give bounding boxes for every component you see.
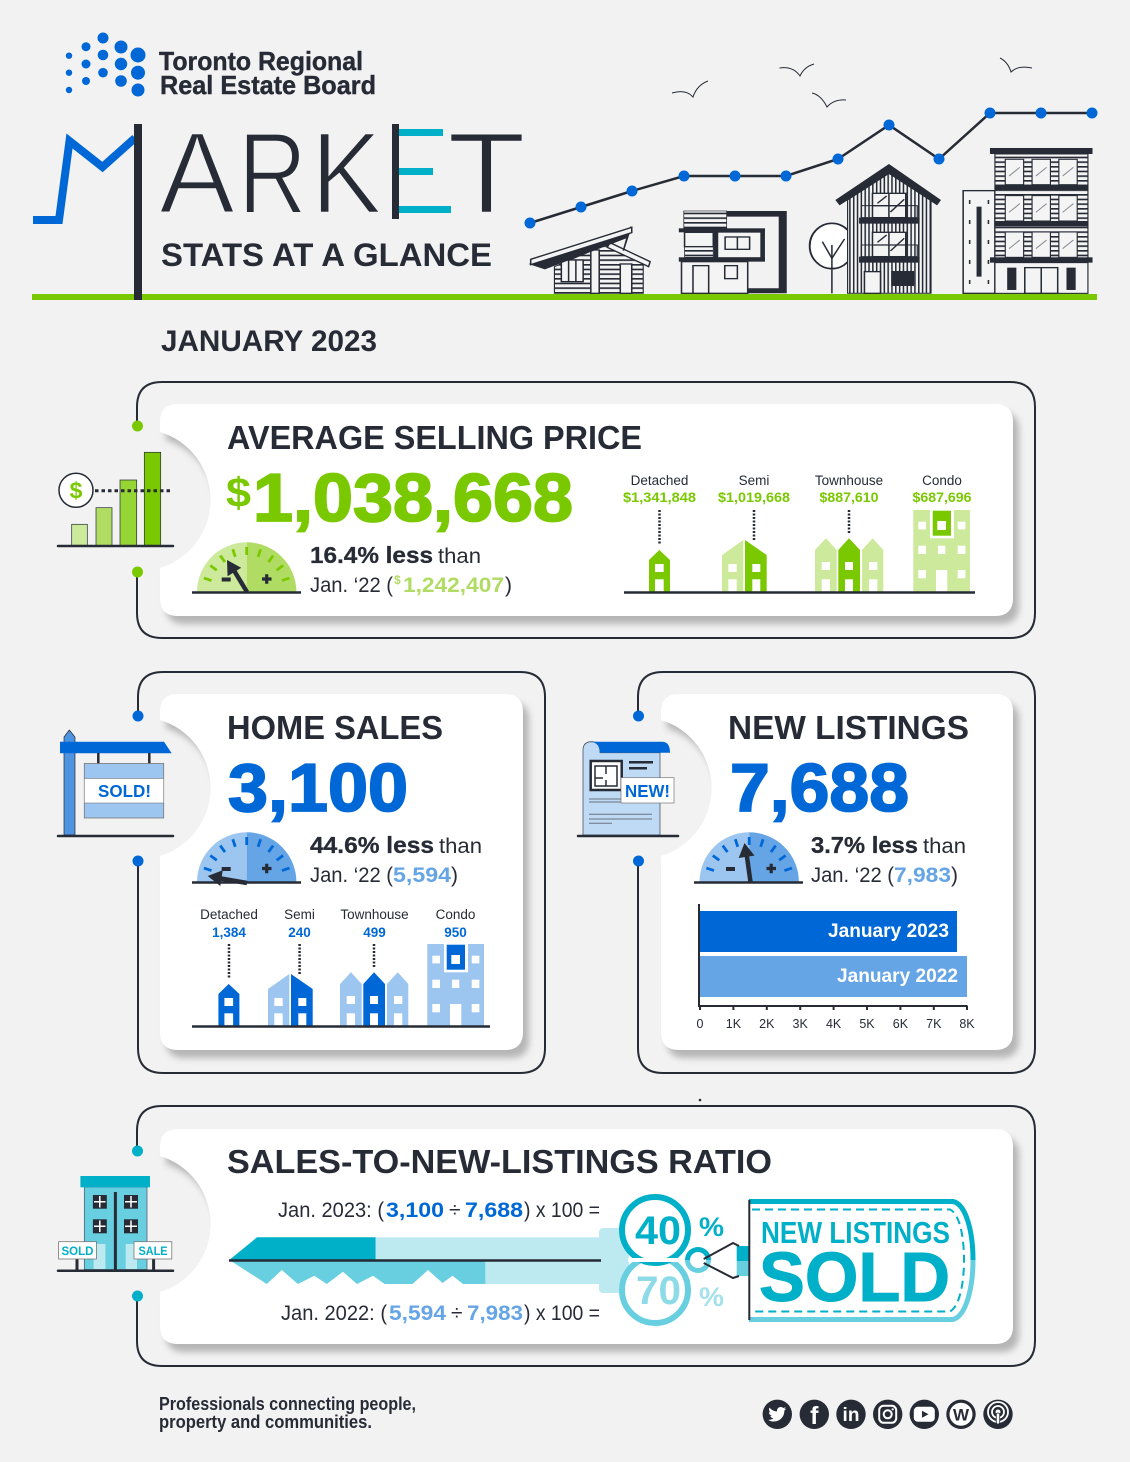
key graphic [229, 1228, 629, 1293]
icon: wordpress [946, 1400, 976, 1429]
subtitle: STATS AT A GLANCE [161, 237, 492, 273]
bar chart: listings comparison: January 2023 [828, 921, 949, 942]
icon: sold sign [58, 730, 173, 836]
change statement [310, 832, 482, 887]
icon: new listing document [578, 742, 678, 836]
letters ARK: R [238, 108, 307, 238]
ratio rings 40% and 70%: % [699, 1282, 724, 1312]
labels: Semi [739, 473, 769, 488]
icon: wordpress: W [953, 1406, 970, 1424]
bar chart: listings comparison: 1K [726, 1017, 742, 1031]
townhouses [340, 972, 408, 1026]
heading: HOME SALES [227, 709, 443, 746]
bar chart: listings comparison: 0 [697, 1017, 704, 1031]
heading: AVERAGE SELLING PRICE [227, 419, 642, 456]
townhouses [815, 538, 883, 592]
change statement: than [438, 545, 481, 568]
house 2 [679, 211, 787, 293]
formula 2022: Jan. 2022: ( [281, 1302, 387, 1325]
change statement: ) [451, 864, 458, 887]
logo wordmark [159, 46, 376, 100]
letters ARK: A [159, 108, 236, 238]
bar chart: listings comparison: January 2022 [837, 966, 958, 987]
formula 2022 [281, 1302, 600, 1325]
bar chart: listings comparison: 2K [759, 1017, 775, 1031]
change statement: than [923, 835, 966, 858]
icon: apartment building with signs: SOLD [62, 1244, 94, 1258]
gauge [192, 832, 301, 886]
labels: Detached [200, 907, 258, 922]
labels: Townhouse [340, 907, 409, 922]
formula 2023: 7,688 [465, 1199, 523, 1222]
labels: Semi [284, 907, 315, 922]
ratio rings 40% and 70% [622, 1197, 724, 1323]
icon: new listing document: NEW! [625, 781, 670, 801]
labels: 950 [444, 925, 467, 940]
icon: facebook: f [810, 1402, 819, 1430]
bar chart: listings comparison: 8K [959, 1017, 975, 1031]
change statement: Jan. ‘22 ( [310, 574, 393, 597]
logo dot mark [66, 32, 146, 96]
logo wordmark: Real Estate Board [160, 70, 376, 100]
letter E [399, 129, 451, 213]
stylised M line [33, 138, 135, 220]
tree [810, 223, 854, 293]
icon: linkedin: in [843, 1405, 859, 1426]
labels: Condo [436, 907, 475, 922]
change statement: than [439, 835, 482, 858]
labels [623, 473, 972, 505]
change statement: $ [394, 573, 401, 587]
change statement [310, 542, 512, 597]
icon: apartment building with signs: SALE [138, 1244, 168, 1258]
leader lines [229, 944, 374, 979]
ratio rings 40% and 70%: % [699, 1212, 724, 1242]
change statement: 1,242,407 [403, 574, 504, 597]
icon: podcast [983, 1400, 1013, 1429]
icon: apartment building with signs [58, 1176, 173, 1271]
icon: sold sign: SOLD! [98, 781, 151, 801]
semi house [722, 540, 767, 592]
formula 2022: ÷ [451, 1302, 463, 1325]
labels: 499 [363, 925, 386, 940]
ratio rings 40% and 70%: 40 [635, 1209, 681, 1253]
labels: 1,384 [212, 925, 246, 940]
icon: linkedin [836, 1400, 866, 1429]
home type prices [623, 473, 975, 592]
letters ARK [159, 108, 382, 238]
labels: Townhouse [815, 473, 883, 488]
labels: 240 [288, 925, 311, 940]
apartment building [963, 148, 1093, 293]
change statement: ) [951, 864, 958, 887]
footer tagline: Professionals connecting people, [159, 1393, 416, 1414]
sold tag [704, 1200, 973, 1320]
change statement: 7,983 [894, 864, 951, 887]
formula 2022: 5,594 [389, 1302, 446, 1325]
logo: Toronto Regional Real Estate Board [66, 32, 376, 100]
ground line [32, 124, 1097, 300]
letter T: T [447, 108, 526, 238]
panel: sales-to-new-listings ratio [58, 1106, 1035, 1366]
icon: youtube [910, 1400, 939, 1429]
labels: $1,341,848 [623, 490, 697, 505]
change statement: 5,594 [393, 864, 451, 887]
labels [200, 907, 475, 940]
formula 2022: ) x 100 = [524, 1302, 600, 1325]
leader lines [660, 510, 849, 545]
main figure: 7,688 [730, 750, 909, 826]
icon: price bar chart [58, 452, 173, 546]
condo [913, 510, 970, 592]
gauge [192, 542, 301, 592]
icon: facebook [800, 1400, 829, 1430]
panel: average selling price [58, 382, 1035, 638]
change statement: ) [505, 574, 512, 597]
formula 2023 [278, 1199, 600, 1222]
formula 2023: Jan. 2023: ( [278, 1199, 384, 1222]
change statement: 44.6% less [310, 832, 434, 858]
gauge [694, 832, 803, 882]
house 3 [835, 164, 941, 293]
footer tagline: property and communities. [159, 1411, 372, 1432]
labels: $1,019,668 [718, 490, 791, 505]
change statement: Jan. ‘22 ( [811, 864, 894, 887]
house 1 [531, 227, 650, 293]
bar chart: listings comparison [697, 904, 975, 1031]
bar chart: listings comparison: 5K [859, 1017, 875, 1031]
labels: Detached [631, 473, 688, 488]
title: MARKET [33, 108, 526, 238]
logo wordmark: Toronto Regional [159, 46, 363, 76]
bar chart: listings comparison: 6K [893, 1017, 909, 1031]
detached house [218, 984, 239, 1026]
formula 2023: ÷ [449, 1199, 461, 1222]
main price figure: 1,038,668 [253, 460, 573, 536]
date heading: JANUARY 2023 [161, 325, 377, 358]
social media icons [763, 1400, 1013, 1430]
labels: $687,696 [912, 490, 972, 505]
letters ARK: K [311, 108, 382, 238]
change statement: 16.4% less [310, 542, 433, 568]
condo [427, 944, 484, 1026]
panel: home sales [58, 672, 545, 1073]
heading: SALES-TO-NEW-LISTINGS RATIO [227, 1143, 772, 1180]
icon: price bar chart: $ [70, 478, 83, 504]
home type sales [192, 907, 490, 1026]
panel: new listings [578, 672, 1035, 1073]
houses illustration [531, 148, 1093, 293]
formula 2022: 7,983 [467, 1302, 523, 1325]
main figure: 3,100 [228, 750, 408, 826]
labels: $887,610 [820, 490, 878, 505]
heading: NEW LISTINGS [728, 709, 969, 746]
icon: twitter [763, 1400, 792, 1429]
detached house [649, 550, 670, 592]
icon: instagram [873, 1400, 902, 1429]
bar chart: listings comparison: 7K [926, 1017, 942, 1031]
birds [672, 58, 1032, 107]
semi house [268, 974, 313, 1026]
change statement: 3.7% less [811, 832, 918, 858]
bar chart: listings comparison: 3K [793, 1017, 809, 1031]
bar chart: listings comparison: 4K [826, 1017, 842, 1031]
sold tag: SOLD [759, 1238, 950, 1316]
change statement [811, 832, 966, 887]
formula 2023: ) x 100 = [524, 1199, 600, 1222]
formula 2023: 3,100 [386, 1199, 444, 1222]
labels: Condo [922, 473, 962, 488]
change statement: Jan. ‘22 ( [310, 864, 393, 887]
rising line chart [524, 108, 1098, 228]
footer tagline [159, 1393, 416, 1432]
main price figure: $ [226, 469, 251, 516]
ratio rings 40% and 70%: 70 [636, 1269, 681, 1313]
sold tag: NEW LISTINGS [761, 1215, 950, 1250]
